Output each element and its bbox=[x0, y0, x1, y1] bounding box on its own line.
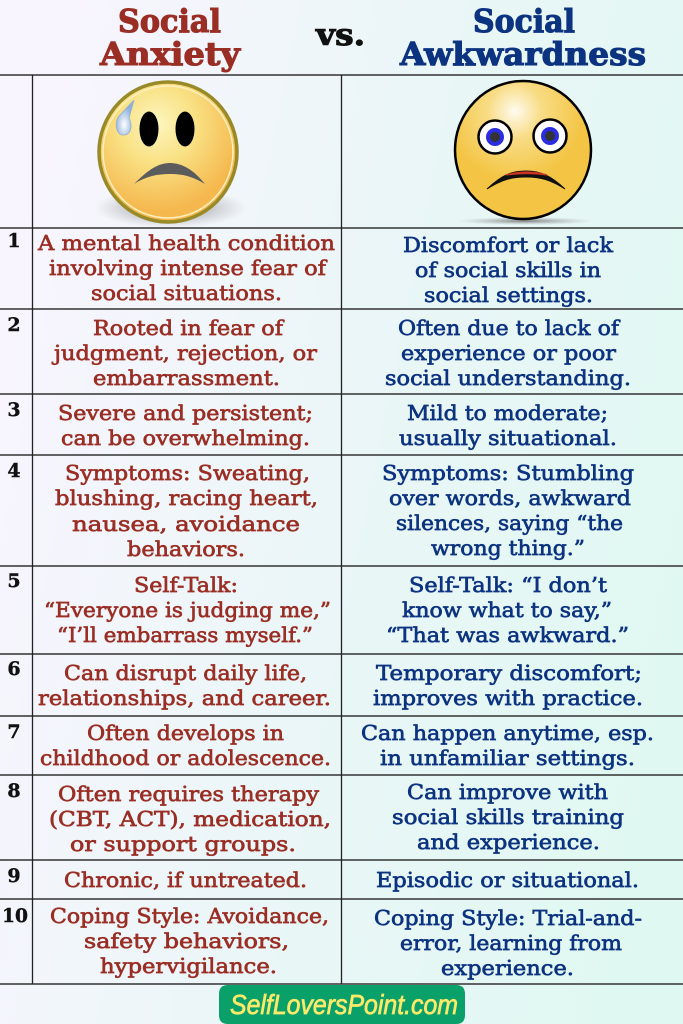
row 10 right: experience. bbox=[441, 956, 574, 980]
row 10 left: hypervigilance. bbox=[100, 954, 277, 978]
row 8 left: (CBT, ACT), medication, bbox=[49, 807, 331, 831]
row 5 right: know what to say,” bbox=[402, 598, 612, 622]
row 9 right: Episodic or situational. bbox=[376, 868, 639, 892]
row 8 left: Often requires therapy bbox=[58, 782, 319, 806]
row 3 right: Mild to moderate; bbox=[407, 401, 608, 425]
row numbers: 10 bbox=[2, 905, 28, 927]
row 10 left bbox=[50, 904, 329, 978]
row numbers: 8 bbox=[7, 780, 21, 802]
icon: awkward wide-eyed face bbox=[455, 81, 593, 225]
vs label: vs. bbox=[315, 18, 365, 53]
row 4 right: over words, awkward bbox=[389, 486, 631, 510]
row numbers: 5 bbox=[7, 570, 21, 592]
title: Social Awkwardness bbox=[399, 2, 646, 73]
row 7 right: in unfamiliar settings. bbox=[380, 746, 635, 770]
row 3 left: Severe and persistent; bbox=[58, 401, 313, 425]
row 7 left: Often develops in bbox=[87, 721, 284, 745]
row 10 left: safety behaviors, bbox=[84, 929, 289, 953]
row 6 right: Temporary discomfort; bbox=[376, 661, 642, 685]
row 4 right: Symptoms: Stumbling bbox=[382, 461, 634, 485]
row 2 left: judgment, rejection, or bbox=[52, 341, 317, 365]
row 8 right: and experience. bbox=[417, 830, 600, 854]
row 4 left: nausea, avoidance bbox=[72, 512, 300, 536]
row 4 left: blushing, racing heart, bbox=[55, 486, 318, 510]
row 2 left: embarrassment. bbox=[93, 366, 280, 390]
row 1 left bbox=[37, 231, 335, 305]
row 1 right: of social skills in bbox=[415, 258, 601, 282]
row 6 right bbox=[373, 661, 643, 710]
row 2 right bbox=[385, 316, 631, 390]
row 4 left: Symptoms: Sweating, bbox=[65, 461, 310, 485]
row 5 left bbox=[44, 573, 331, 647]
row 8 right bbox=[392, 780, 624, 854]
icon: anxious sweating face bbox=[94, 82, 246, 228]
row 10 right: error, learning from bbox=[400, 931, 622, 955]
row numbers bbox=[2, 230, 28, 927]
row 5 left: Self-Talk: bbox=[134, 573, 238, 597]
row 3 right: usually situational. bbox=[399, 426, 617, 450]
row 2 left: Rooted in fear of bbox=[93, 316, 285, 340]
row numbers: 6 bbox=[7, 658, 21, 680]
row 1 right: Discomfort or lack bbox=[403, 233, 614, 257]
row 1 right bbox=[403, 233, 614, 307]
title: Social Anxiety bbox=[99, 2, 241, 73]
row 8 right: Can improve with bbox=[407, 780, 608, 804]
row 6 left: Can disrupt daily life, bbox=[64, 661, 307, 685]
row 8 left bbox=[49, 782, 331, 856]
row 9 left: Chronic, if untreated. bbox=[64, 868, 307, 892]
row 10 left: Coping Style: Avoidance, bbox=[50, 904, 329, 928]
row 5 left: “I’ll embarrass myself.” bbox=[57, 623, 313, 647]
row 3 right bbox=[399, 401, 617, 450]
row numbers: 4 bbox=[7, 460, 21, 482]
row 7 left bbox=[40, 721, 331, 770]
row 4 right bbox=[382, 461, 634, 560]
row 6 right: improves with practice. bbox=[373, 686, 643, 710]
row 2 right: social understanding. bbox=[385, 366, 631, 390]
row 4 right: silences, saying “the bbox=[396, 511, 623, 535]
row 5 right: Self-Talk: “I don’t bbox=[409, 573, 608, 597]
row 1 left: involving intense fear of bbox=[49, 256, 328, 280]
row 2 right: experience or poor bbox=[401, 341, 616, 365]
row numbers: 3 bbox=[7, 399, 21, 421]
row 7 left: childhood or adolescence. bbox=[40, 746, 331, 770]
row 4 left bbox=[55, 461, 318, 561]
row 5 right bbox=[386, 573, 629, 647]
row 1 right: social settings. bbox=[424, 283, 593, 307]
row numbers: 1 bbox=[7, 230, 21, 252]
row 1 left: A mental health condition bbox=[37, 231, 335, 255]
row 5 left: “Everyone is judging me,” bbox=[44, 598, 331, 622]
footer logo: SelfLoversPoint.com bbox=[230, 989, 458, 1020]
row numbers: 2 bbox=[7, 314, 21, 336]
row numbers: 7 bbox=[7, 721, 21, 743]
title: Social Anxiety: Anxiety bbox=[99, 35, 241, 73]
row 3 left: can be overwhelming. bbox=[61, 426, 310, 450]
row 4 right: wrong thing.” bbox=[431, 536, 585, 560]
row 3 left bbox=[58, 401, 313, 450]
row 2 right: Often due to lack of bbox=[398, 316, 621, 340]
row 1 left: social situations. bbox=[91, 281, 282, 305]
row 2 left bbox=[52, 316, 317, 390]
row 10 right: Coping Style: Trial-and- bbox=[374, 906, 642, 930]
column: social awkwardness text bbox=[361, 233, 654, 980]
title: Social Anxiety: Social bbox=[118, 2, 221, 40]
row numbers: 9 bbox=[7, 865, 21, 887]
row 7 right bbox=[361, 721, 654, 770]
row 8 right: social skills training bbox=[392, 805, 624, 829]
row 6 left bbox=[38, 661, 331, 710]
row 8 left: or support groups. bbox=[70, 832, 296, 856]
title: Social Awkwardness: Awkwardness bbox=[399, 35, 646, 73]
title: Social Awkwardness: Social bbox=[473, 2, 575, 40]
column: social anxiety text bbox=[37, 231, 335, 978]
row 7 right: Can happen anytime, esp. bbox=[361, 721, 654, 745]
row 4 left: behaviors. bbox=[127, 537, 245, 561]
row 10 right bbox=[374, 906, 642, 980]
row 5 right: “That was awkward.” bbox=[386, 623, 629, 647]
row 6 left: relationships, and career. bbox=[38, 686, 331, 710]
